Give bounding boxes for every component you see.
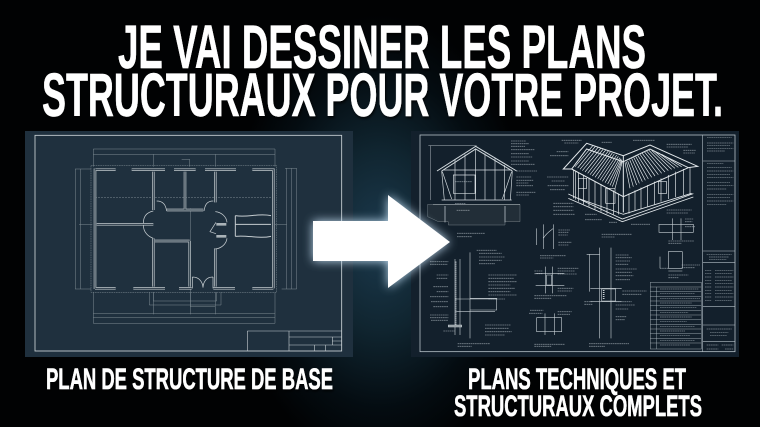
sheet border and title block [35, 135, 342, 351]
panel: basic structure plan [25, 131, 353, 357]
wall cavities [95, 168, 273, 289]
icon: isometric roof framing [563, 143, 698, 222]
caption: basic plan: PLAN DE STRUCTURE DE BASE [46, 363, 333, 396]
doors and closet [143, 201, 271, 288]
schedule table [650, 282, 701, 349]
icon: gable section drawing [428, 146, 520, 222]
arrow [313, 195, 450, 288]
panel: complete technical plans [411, 131, 739, 357]
dimension lines [75, 149, 297, 323]
foundation [428, 204, 520, 225]
caption: complete plans [454, 363, 702, 423]
sheet border [420, 135, 735, 352]
title [42, 13, 723, 129]
walls [95, 168, 273, 289]
icon: wall section details [448, 218, 693, 338]
annotation text marks [430, 138, 733, 349]
